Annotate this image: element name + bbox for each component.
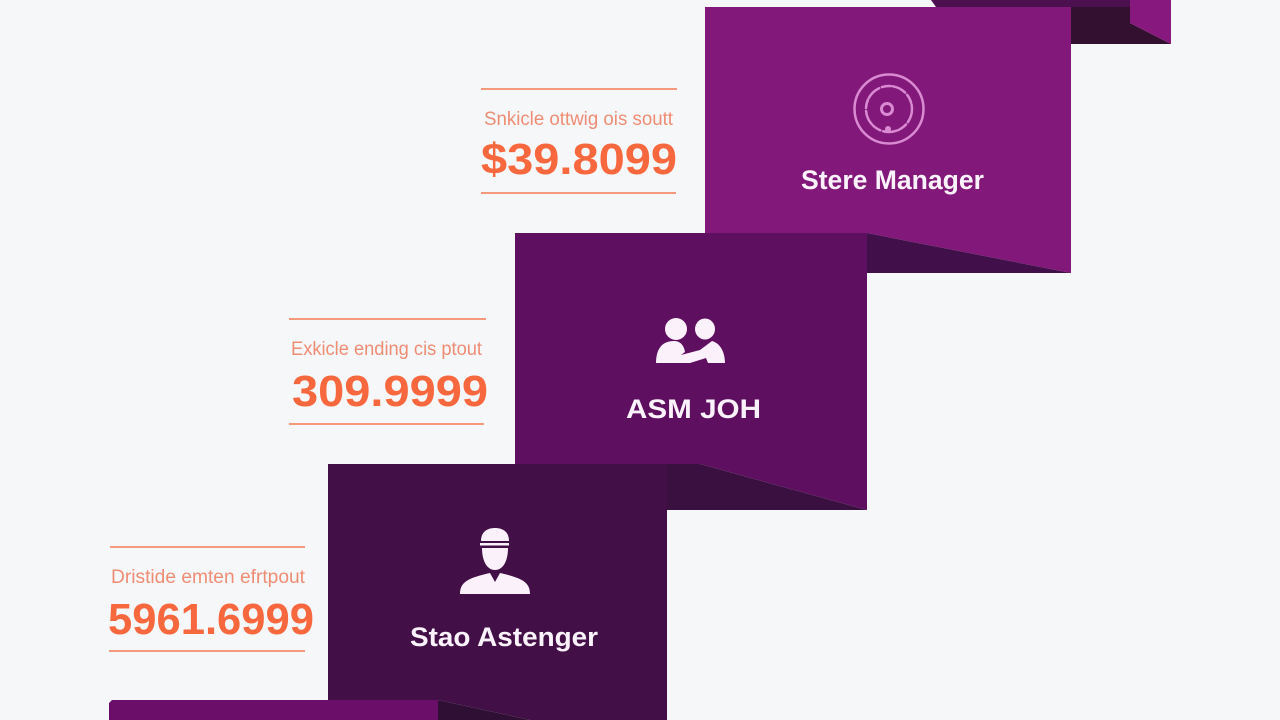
- role title: ASM JOH: [626, 394, 761, 424]
- role title: Stere Manager: [801, 165, 984, 195]
- salary callout: ASM: Exkicle ending cis ptout: [291, 339, 483, 360]
- salary callout: Store Manager: $39.8099: [481, 135, 677, 184]
- card face: [328, 464, 667, 720]
- icon: circular badge: [854, 74, 924, 144]
- salary callout: Store Manager: [481, 89, 677, 193]
- role title: Stao Astenger: [410, 622, 599, 652]
- step: Shop Assistant card: [328, 464, 667, 720]
- card face: [705, 7, 1071, 273]
- step: top card fragment: [931, 0, 1171, 44]
- step: Store Manager card: [705, 7, 1071, 273]
- card fold shadow: [867, 233, 1071, 273]
- step: bottom card fragment: [109, 700, 438, 720]
- card fold shadow: [667, 464, 867, 510]
- salary callout: Store Manager: Snkicle ottwig ois soutt: [484, 109, 674, 130]
- salary callout: Shop Assistant: [108, 547, 314, 651]
- icon: person with cap: [460, 528, 530, 594]
- card face: [515, 233, 867, 510]
- salary callout: ASM: [289, 319, 488, 424]
- salary callout: ASM: 309.9999: [292, 367, 488, 416]
- salary callout: Shop Assistant: Dristide emten efrtpout: [111, 567, 306, 588]
- step: ASM card: [515, 233, 867, 510]
- icon: two people: [656, 318, 725, 363]
- salary callout: Shop Assistant: 5961.6999: [108, 595, 314, 644]
- card fold shadow: [438, 700, 530, 720]
